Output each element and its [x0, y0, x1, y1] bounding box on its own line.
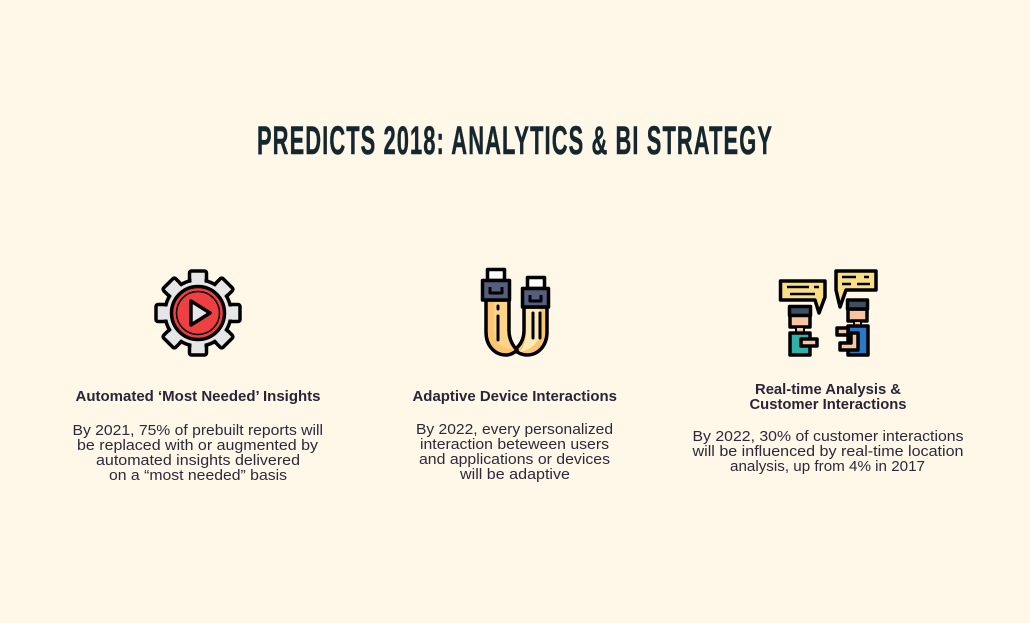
panel: automated insights — [72, 271, 323, 484]
icon: two people talking — [780, 271, 876, 355]
text block: real-time analysis: analysis, up from 4% in 2017 — [730, 458, 925, 475]
heading: real-time analysis — [750, 382, 906, 413]
text block: automated insights: automated insights delivered — [96, 452, 300, 469]
text block: automated insights: on a “most needed” basis — [109, 467, 287, 484]
icon: gear with play button — [156, 271, 240, 355]
heading: automated insights: Automated ‘Most Needed’ Insights — [76, 389, 320, 405]
text block: real-time analysis — [691, 428, 964, 475]
text block: adaptive device interactions: interaction beteween users — [420, 436, 609, 453]
icon: cable connectors — [482, 270, 548, 355]
heading: real-time analysis: Real-time Analysis & — [755, 382, 902, 398]
text block: adaptive device interactions — [416, 421, 613, 483]
text block: adaptive device interactions: and applications or devices — [419, 451, 610, 468]
text block: automated insights: By 2021, 75% of prebuilt reports will — [72, 422, 323, 439]
text block: real-time analysis: will be influenced by real-time location — [691, 443, 964, 460]
heading: adaptive device interactions: Adaptive Device Interactions — [412, 389, 617, 405]
text block: adaptive device interactions: By 2022, every personalized — [416, 421, 613, 438]
heading: real-time analysis: Customer Interactions — [750, 397, 906, 413]
text block: automated insights: be replaced with or augmented by — [77, 437, 319, 454]
text block: real-time analysis: By 2022, 30% of customer interactions — [692, 428, 964, 445]
text block: adaptive device interactions: will be adaptive — [459, 466, 570, 483]
text block: automated insights — [72, 422, 323, 484]
panel: real-time analysis — [691, 271, 964, 475]
panel: adaptive device interactions — [412, 270, 617, 483]
